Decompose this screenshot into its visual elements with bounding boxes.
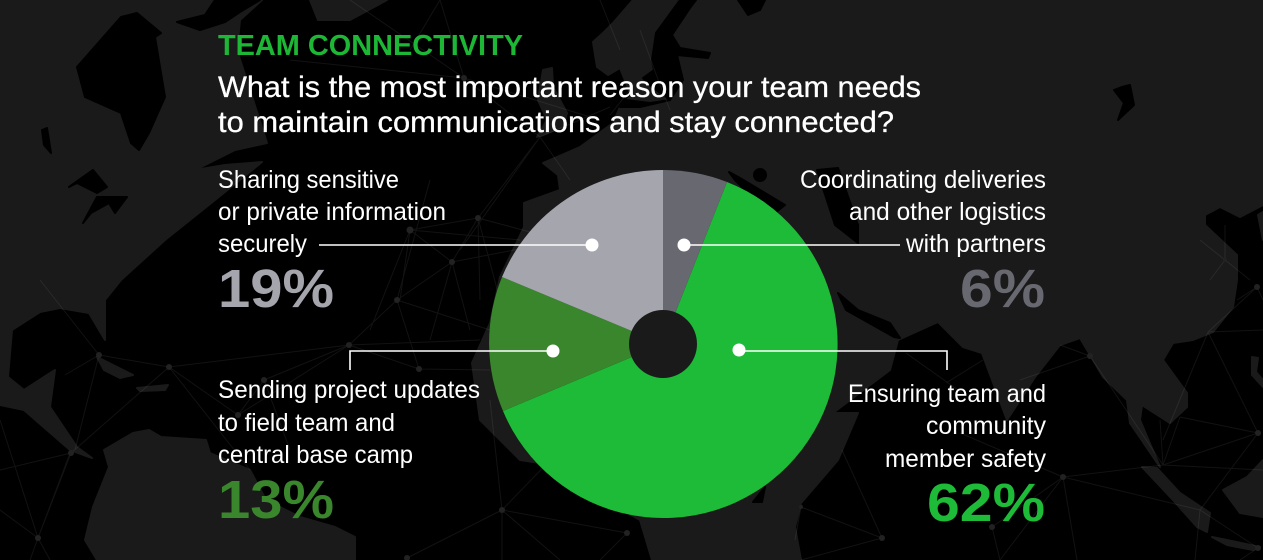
label: logistics: [800, 166, 1046, 319]
label: project updates: to field team and: [218, 409, 395, 437]
label: logistics: Coordinating deliveries: [800, 166, 1046, 194]
slice: project updates 13%: [489, 277, 663, 411]
slice: logistics 6%: [663, 170, 727, 344]
label: sensitive information: 19%: [218, 259, 334, 319]
leader line: logistics: [678, 238, 900, 252]
label: team safety: Ensuring team and: [848, 380, 1046, 408]
label: project updates: central base camp: [218, 441, 413, 469]
label: logistics: 6%: [960, 259, 1045, 319]
label: team safety: [848, 380, 1046, 533]
label: project updates: 13%: [218, 470, 334, 530]
title: TEAM CONNECTIVITY: [218, 30, 523, 62]
label: sensitive information: or private information: [218, 198, 446, 226]
label: team safety: 62%: [927, 473, 1045, 533]
label: logistics: and other logistics: [849, 198, 1046, 226]
label: logistics: with partners: [905, 230, 1046, 258]
label: project updates: Sending project updates: [218, 376, 480, 404]
question heading: [218, 71, 921, 139]
label: sensitive information: securely: [218, 230, 307, 258]
label: sensitive information: Sharing sensitive: [218, 166, 399, 194]
question heading: What is the most important reason your team needs: [218, 71, 921, 104]
question heading: to maintain communications and stay connected?: [218, 106, 894, 139]
label: team safety: community: [926, 412, 1046, 440]
label: project updates: [218, 376, 480, 530]
label: team safety: member safety: [885, 445, 1046, 473]
leader line: project updates: [350, 344, 560, 370]
label: sensitive information: [218, 166, 446, 319]
slice: sensitive information 19%: [502, 170, 663, 344]
leader line: sensitive information: [319, 238, 598, 252]
leader line: team safety: [732, 344, 947, 370]
pie chart: [489, 170, 838, 518]
slice: safety 62%: [503, 182, 838, 518]
pie centre hole: [629, 310, 697, 378]
